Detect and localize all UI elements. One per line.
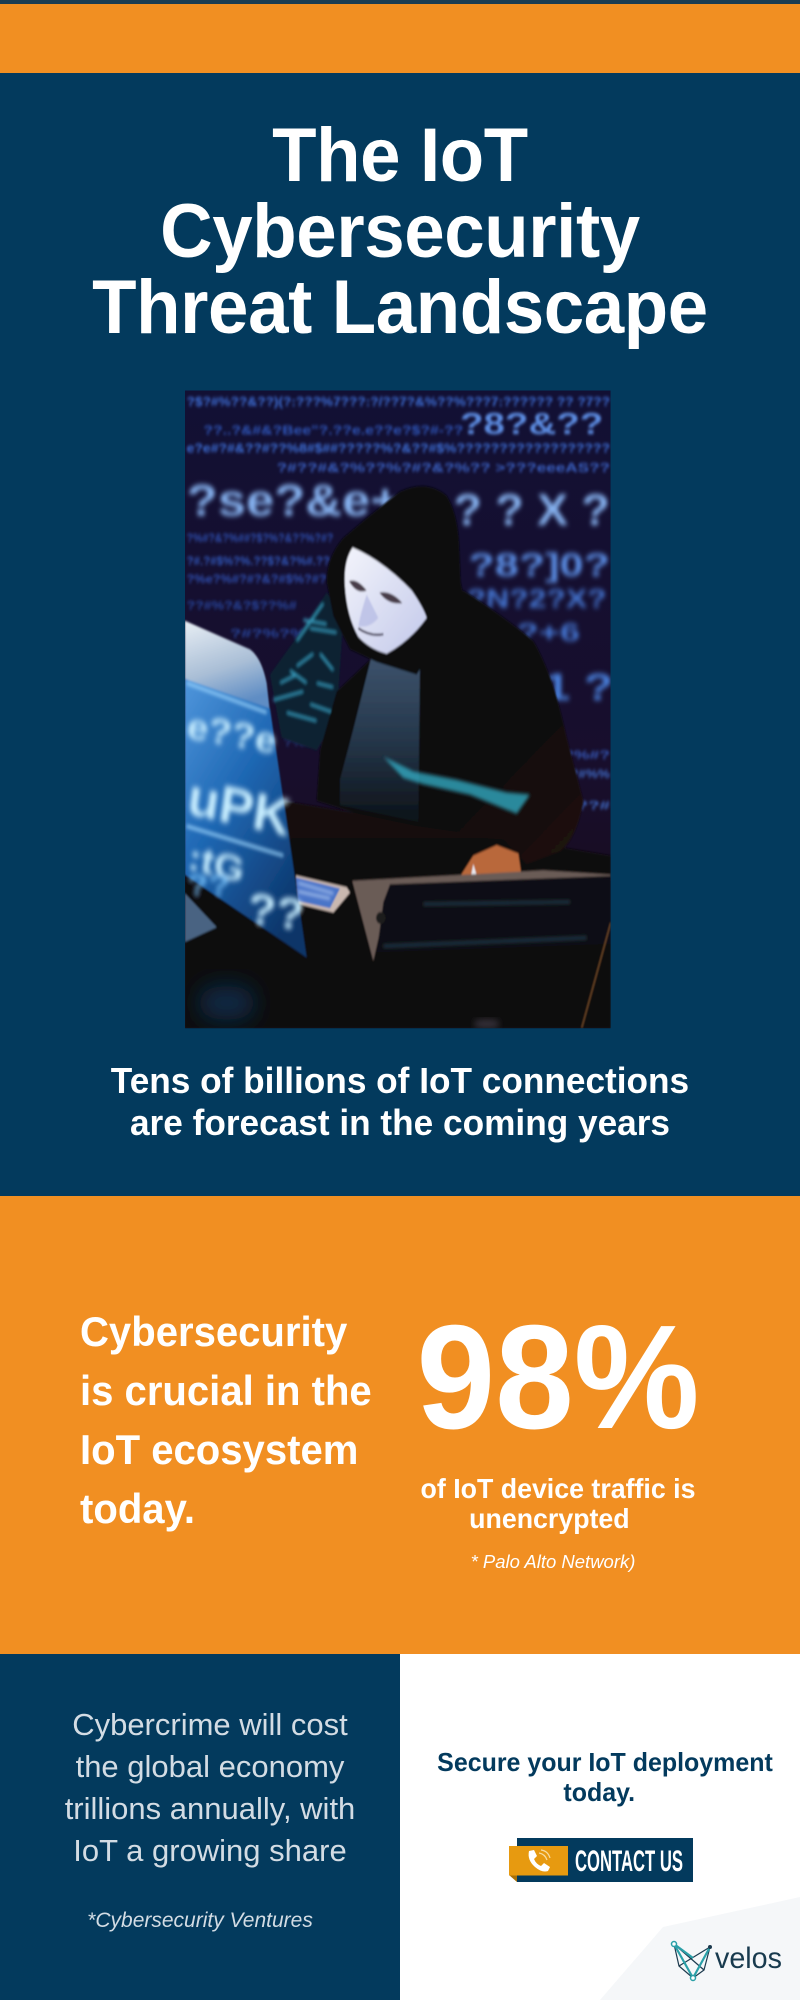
- projected code on the wall: ?%#: [283, 736, 313, 750]
- hand: [460, 845, 522, 877]
- panel: orange statistic band: [0, 1196, 800, 1654]
- cost text: Cybercrime will cost: [72, 1707, 348, 1742]
- jacket: [317, 590, 583, 864]
- right laptop: [352, 870, 611, 961]
- left laptop: ??: [246, 884, 306, 940]
- title: [92, 113, 708, 350]
- title: Cybersecurity: [160, 189, 640, 274]
- left laptop: e??e: [185, 706, 279, 761]
- projected code on the wall: ?se?&e+: [187, 477, 400, 526]
- statement text: today.: [80, 1485, 195, 1532]
- projected code on the wall: [187, 396, 613, 813]
- statement text: IoT ecosystem: [80, 1426, 358, 1473]
- cost text: IoT a growing share: [73, 1833, 347, 1868]
- logo: velos: [670, 1940, 782, 1982]
- wordmark: velos: [715, 1942, 782, 1975]
- statement text: is crucial in the: [80, 1367, 372, 1414]
- statement text: Cybersecurity: [80, 1308, 347, 1355]
- photo: masked hacker at laptops: [185, 390, 611, 1028]
- statistic caption: unencrypted: [469, 1503, 630, 1534]
- projected code on the wall: ?+6: [517, 618, 580, 647]
- projected code on the wall: ??#: [577, 799, 610, 813]
- left laptop: uPK: [184, 768, 294, 848]
- projected code on the wall: ?8?]0?: [468, 548, 610, 584]
- title: The IoT: [272, 113, 528, 198]
- grey sweater: [340, 649, 420, 822]
- projected code on the wall: ?#?%?%..: [230, 628, 317, 641]
- projected code on the wall: ?#%%: [570, 768, 611, 781]
- statement text: [80, 1308, 372, 1532]
- left laptop: :tG: [185, 837, 247, 891]
- title: Threat Landscape: [92, 265, 708, 350]
- cost text: [65, 1707, 355, 1868]
- projected code on the wall: ?#.?#$%?%.??$?&?%#.??: [187, 555, 330, 569]
- big number 98%: 98%: [417, 1295, 699, 1460]
- source: *Cybersecurity Ventures: [87, 1909, 313, 1932]
- projected code on the wall: ?$?#%??&??)(?:???%7???:?/??7?&%??%???7:?????? ?? ?7??: [187, 396, 610, 409]
- panel: cybercrime cost: [0, 1654, 400, 2000]
- hood: [327, 486, 465, 675]
- projected code on the wall: ??..?&#&?Bee"?.??e.e??e?$?#-??: [203, 425, 463, 438]
- icon: phone: [529, 1850, 550, 1872]
- statistic caption: of IoT device traffic is: [421, 1473, 695, 1504]
- call to action heading: Secure your IoT deployment: [437, 1747, 773, 1777]
- top orange band: [0, 0, 800, 73]
- phone on desk: [296, 875, 350, 912]
- projected code on the wall: ??#%?&?$??%#: [187, 599, 297, 613]
- wall background: [185, 391, 611, 1028]
- subtitle: Tens of billions of IoT connections: [111, 1060, 689, 1101]
- subtitle: are forecast in the coming years: [130, 1102, 670, 1143]
- projected code on the wall: ?%#?: [563, 749, 610, 762]
- contact us button: [509, 1838, 693, 1882]
- cost text: the global economy: [76, 1749, 344, 1784]
- subtitle: [111, 1060, 689, 1143]
- left arm with projected code: [270, 593, 343, 750]
- left laptop: ??: [187, 869, 230, 902]
- logo backdrop shape: [600, 1897, 800, 2000]
- projected code on the wall: ? ? X ?: [453, 486, 610, 535]
- light streak on sweater: [383, 757, 530, 814]
- source note: * Palo Alto Network): [471, 1551, 635, 1572]
- left laptop: [184, 621, 307, 958]
- icon: velos mark: [672, 1942, 712, 1980]
- projected code on the wall: ?N?2?X?: [467, 584, 607, 613]
- projected code on the wall: ?%#?&?%##?$?%?&??%?#?: [187, 532, 333, 545]
- projected code on the wall: 1 ?: [543, 667, 613, 709]
- panel: call to action: [400, 1654, 800, 2000]
- table edge glow: [582, 923, 611, 1028]
- projected code on the wall: ?#??#&?%??%?#?&?%?? >???eeeAS??: [277, 462, 610, 475]
- projected code on the wall: ?%e?%#?#?&?#$%?#?: [187, 573, 327, 586]
- table: [185, 801, 611, 1028]
- call to action heading: today.: [563, 1777, 635, 1807]
- cost text: trillions annually, with: [65, 1791, 355, 1826]
- call to action heading: [437, 1747, 773, 1807]
- projected code on the wall: ?8?&??: [460, 406, 603, 441]
- statistic caption: [421, 1473, 695, 1534]
- white mask: [345, 548, 427, 654]
- projected code on the wall: e?e#?#&??#??%8#$##?????%?&??#$%??????????????????: [187, 442, 610, 456]
